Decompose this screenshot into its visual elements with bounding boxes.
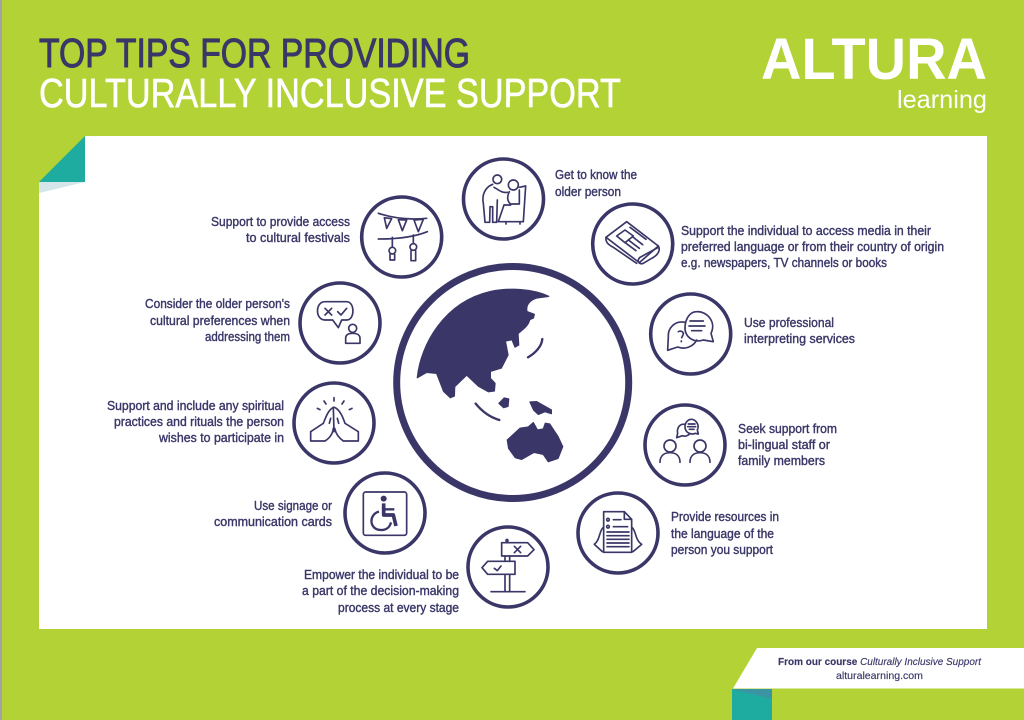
tip: interpreting services [651,294,855,374]
tip: access media: Support the individual to access media in their [681,224,931,238]
footer: course credit banner: alturalearning.com [836,670,923,682]
footer: course credit banner [732,648,1024,720]
tip: get to know the older person [464,159,637,239]
logo: Altura Learning: ALTURA [761,27,987,92]
tip: provide translated resources: person you support [671,543,773,557]
icon: signpost [482,539,534,592]
tip: provide translated resources [578,493,779,573]
tip: decision-making [302,527,548,615]
tip: decision-making: Empower the individual to be [304,568,459,582]
tip: cultural festivals: Support to provide access [211,215,350,229]
tip: cultural preferences: addressing them [205,330,290,344]
tip: cultural festivals: to cultural festivals [246,231,350,245]
tip: bi-lingual staff or family: Seek support from [738,422,837,436]
tip: cultural festivals [211,197,442,277]
tip: bi-lingual staff or family: family members [738,454,825,468]
tip: access media: preferred language or from their country of origin [681,240,944,254]
title [39,30,621,116]
icon: newspaper [606,222,659,264]
tip: cultural preferences: cultural preferences when [150,314,290,328]
footer: course credit banner: From our course Culturally Inclusive Support [778,656,982,668]
tip: interpreting services: Use professional [744,316,834,330]
tip: decision-making: a part of the decision-making [302,584,459,598]
icon: speech bubbles [668,312,713,350]
tip: access media: e.g. newspapers, TV channels or books [681,256,887,270]
title: CULTURALLY INCLUSIVE SUPPORT [39,70,621,116]
tip: provide translated resources: the language of the [671,527,774,541]
icon: bunting and lanterns [378,213,427,261]
icon: document held in hands [594,512,642,552]
tip: bi-lingual staff or family: bi-lingual staff or [738,438,830,452]
tip: get to know the older person: Get to know the [555,168,637,182]
tip: signage or communication cards: Use signage or [254,499,332,513]
panel: white content sheet [39,136,987,629]
tip: signage or communication cards [214,473,425,553]
icon: two people talking [660,419,710,462]
tip: interpreting services: interpreting services [744,332,855,346]
tip: spiritual practices [107,383,374,463]
tip: access media [593,204,944,284]
logo: Altura Learning: learning [897,86,987,114]
tip: provide translated resources: Provide resources in [671,510,779,524]
tip: signage or communication cards: communication cards [214,515,332,529]
globe [397,266,629,498]
tip: spiritual practices: practices and rituals the person [114,415,284,429]
tip: cultural preferences: Consider the older person's [145,297,290,311]
icon: praying hands [311,398,358,441]
tip: spiritual practices: Support and include any spiritual [107,399,284,413]
tip: get to know the older person: older person [555,185,621,199]
tip: cultural preferences [145,283,380,363]
tip: bi-lingual staff or family [645,405,837,485]
icon: speech bubble and person [317,302,360,343]
tip: decision-making: process at every stage [338,601,459,615]
icon: accessibility sign [363,492,407,535]
tip: spiritual practices: wishes to participate in [158,431,284,445]
icon: carer and seated person [483,175,526,224]
title: TOP TIPS FOR PROVIDING [39,30,470,76]
